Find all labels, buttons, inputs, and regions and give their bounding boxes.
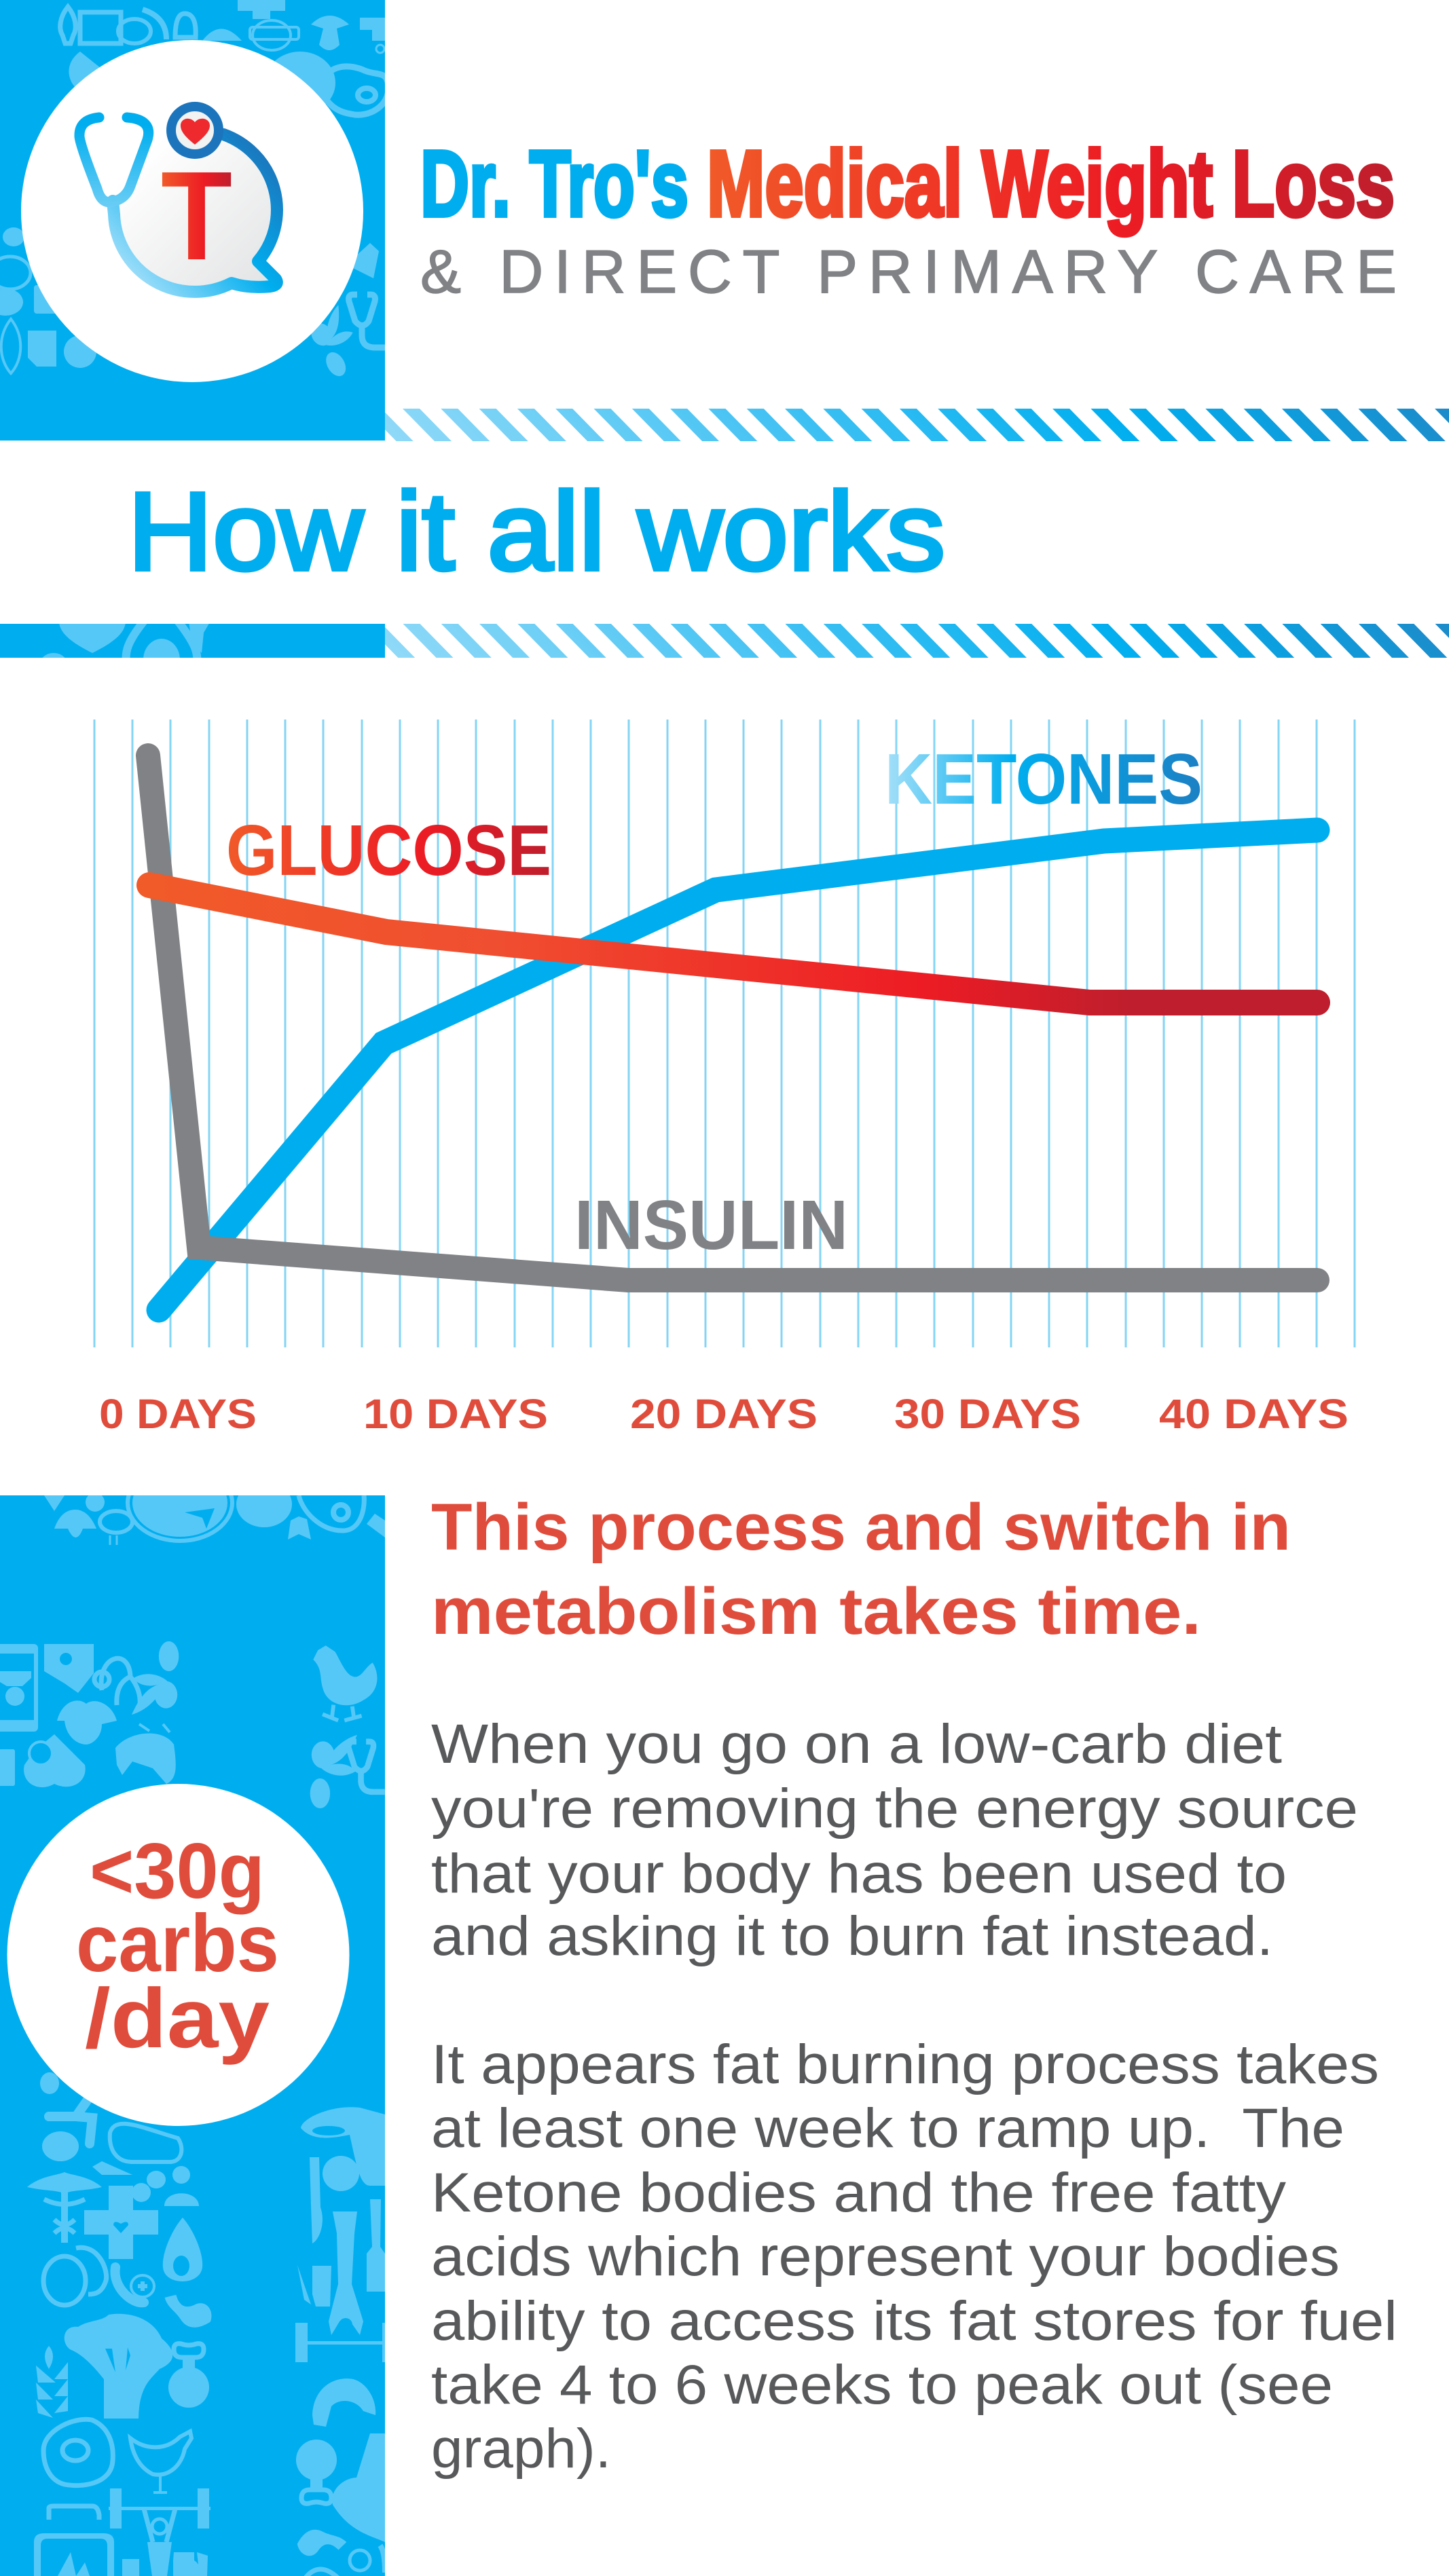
icon: gear circle [41, 656, 67, 682]
icon: heart [181, 119, 210, 145]
icon: egg [143, 639, 180, 681]
icon: knife [310, 2157, 323, 2243]
logo: stethoscope speech bubble [79, 107, 277, 292]
heading line 1: This process and switch in [431, 1490, 1291, 1564]
icon: plate [323, 2156, 359, 2191]
icon: shrimp [165, 2295, 211, 2328]
text block: paragraph two [431, 2034, 1397, 2480]
line chart: ketones glucose insulin [94, 720, 1355, 1437]
body line: that your body has been used to [431, 1843, 1287, 1905]
callout text: 30g: <30g [90, 1827, 265, 1915]
icon: phone with plus lower [350, 2550, 370, 2571]
icon: t-bone steak [110, 2124, 181, 2162]
logo letter T: T [161, 146, 232, 286]
icon: olive [42, 2131, 79, 2161]
decorative stripe band: below heading [382, 624, 1449, 658]
icon: eggs [43, 2256, 86, 2305]
panel: blue band under heading [0, 621, 385, 682]
icon: leaf outline [1, 319, 20, 373]
body line: you're removing the energy source [431, 1778, 1358, 1840]
icon: carrot [92, 2161, 132, 2175]
icon: shrimp pair [132, 2183, 151, 2202]
icon: phone curve [143, 10, 166, 39]
title: Dr. Tro's Medical Weight Loss [420, 132, 1395, 236]
callout text: carbs: carbs [76, 1898, 279, 1989]
icon: avocado [163, 2218, 202, 2281]
logo: speech bubble fill [114, 129, 277, 292]
icon: clipboard [0, 1749, 15, 1786]
icon: steak outline [323, 67, 388, 115]
background icons: header panel [0, 0, 388, 379]
body line: Ketone bodies and the free fatty [431, 2162, 1286, 2224]
icon: large steak [132, 1469, 227, 1537]
icon: light bulb [60, 7, 75, 43]
icon: oval [0, 288, 23, 316]
body line: It appears fat burning process takes [431, 2034, 1379, 2095]
body line: and asking it to burn fat instead. [431, 1905, 1273, 1967]
icon: clipboard [28, 331, 56, 367]
icon: doctor [172, 2166, 190, 2184]
icon: handstand figure [329, 2211, 363, 2335]
label: insulin: INSULIN [574, 1186, 848, 1264]
body line: acids which represent your bodies [431, 2226, 1340, 2288]
icon: wheat [36, 2346, 68, 2418]
icon: cheese [44, 1644, 94, 1693]
icon: dumbbell [295, 2323, 386, 2362]
panel: header blue logo panel [0, 0, 388, 441]
icon: shrimp lower [294, 2518, 348, 2566]
icon: stethoscope [101, 1658, 140, 1705]
icon: broccoli [65, 2314, 172, 2419]
axis label: 40 days: 40 DAYS [1159, 1391, 1349, 1437]
line: ketones [159, 830, 1317, 1310]
callout text: per day: /day [85, 1972, 270, 2066]
icon: egg with spots [236, 1481, 292, 1527]
logo: stethoscope tubes [79, 117, 149, 202]
icon: olive branch [132, 1641, 179, 1715]
icon: hen [313, 1645, 377, 1721]
icon: lamp [54, 1510, 96, 1537]
icon: mushroom [311, 16, 349, 50]
icon: fruit blob [64, 335, 96, 368]
body line: When you go on a low-carb diet [431, 1713, 1282, 1775]
axis label: 20 days: 20 DAYS [630, 1391, 818, 1437]
line: glucose [149, 885, 1317, 1003]
icon: heart rate mound [202, 29, 242, 41]
icon: hen outline [130, 2431, 191, 2475]
icon: mushroom [301, 2107, 385, 2186]
icon: hand bubble with plus [118, 19, 151, 43]
icon: smartphone [0, 1644, 38, 1732]
icon: monitor [80, 12, 121, 43]
icon: fork [367, 2199, 385, 2292]
callout: carb limit circle [7, 1784, 349, 2126]
icon: heart shape [59, 621, 126, 653]
icon: footprint cluster [40, 2072, 59, 2094]
line: insulin [148, 755, 1317, 1280]
icon: caduceus [27, 2172, 102, 2194]
icon: carrot and bottle [297, 2265, 311, 2304]
icon: drumstick lower [296, 2440, 337, 2503]
icon: steak outline [299, 1495, 364, 1531]
icon: drumstick [168, 2344, 209, 2408]
axis label: 30 days: 30 DAYS [894, 1391, 1081, 1437]
icon: olive branch [311, 305, 353, 376]
icon: lamp [175, 14, 196, 37]
text block: paragraph one [431, 1713, 1358, 1967]
icon: small heart top [44, 1495, 65, 1511]
icon: small book [288, 1516, 311, 1539]
icon: first aid kit [49, 2506, 99, 2520]
icon: arrowhead [189, 621, 210, 653]
icon: grilled oval [100, 1511, 132, 1533]
body line: ability to access its fat stores for fuel [431, 2290, 1397, 2352]
icon: cloud [3, 227, 24, 246]
label: ketones: KETONES [885, 739, 1203, 819]
body line: take 4 to 6 weeks to peak out (see [431, 2354, 1333, 2416]
icon: broccoli lower [332, 2433, 385, 2542]
x axis labels [99, 1391, 1349, 1437]
icon: leaf [69, 52, 100, 88]
logo text: Dr. Tro's: Dr. Tro's [420, 132, 689, 236]
icon: measuring tape [250, 27, 299, 39]
icon: runner [49, 2099, 92, 2144]
icon: avocado blob [274, 52, 335, 105]
icon: brain oval [0, 257, 31, 289]
background icons: band [41, 621, 210, 682]
heading line 2: metabolism takes time. [431, 1574, 1201, 1648]
icon: cross [238, 0, 285, 19]
icon: pill badge [86, 1493, 105, 1512]
label: glucose: GLUCOSE [226, 810, 551, 891]
panel: lower blue side panel [0, 1465, 386, 2576]
icon: roast chicken [115, 1734, 176, 1784]
icon: stethoscope [349, 295, 387, 348]
icon: fish tail [367, 1514, 385, 1537]
body line: at least one week to ramp up. The [431, 2097, 1344, 2159]
axis label: 10 days: 10 DAYS [363, 1391, 548, 1437]
icon: medical cross with heart [84, 2186, 158, 2259]
icon: heart gauge [24, 1734, 86, 1787]
panel: white logo circle [21, 40, 363, 382]
icon: bottle and carrot [173, 2552, 201, 2576]
icon: egg outline [43, 2419, 113, 2486]
icon: bottle [360, 18, 385, 41]
icon: device [34, 285, 56, 314]
icon: oval outline [126, 621, 197, 662]
subtitle: direct primary care: & DIRECT PRIMARY CARE [420, 238, 1397, 306]
icon: telephone with plus [115, 2267, 144, 2302]
background icons: lower panel [0, 1465, 386, 2576]
icon: olive branch right [310, 1735, 357, 1808]
axis label: 0 days: 0 DAYS [99, 1391, 257, 1437]
icon: strawberry [57, 1700, 117, 1744]
icon: stethoscope right [348, 1742, 385, 1792]
icon: egg lower [304, 2569, 340, 2576]
icon: turkey [312, 2378, 375, 2427]
icon: weightlifter [109, 2488, 210, 2576]
heading: How it all works: How it all works [128, 469, 945, 593]
body line: graph). [431, 2418, 611, 2480]
logo: chest piece [171, 107, 219, 154]
logo: speech bubble ring [113, 134, 277, 292]
heading: process takes time [431, 1490, 1291, 1648]
decorative stripe band: top [380, 409, 1449, 441]
icon: chicken tail [353, 243, 379, 278]
